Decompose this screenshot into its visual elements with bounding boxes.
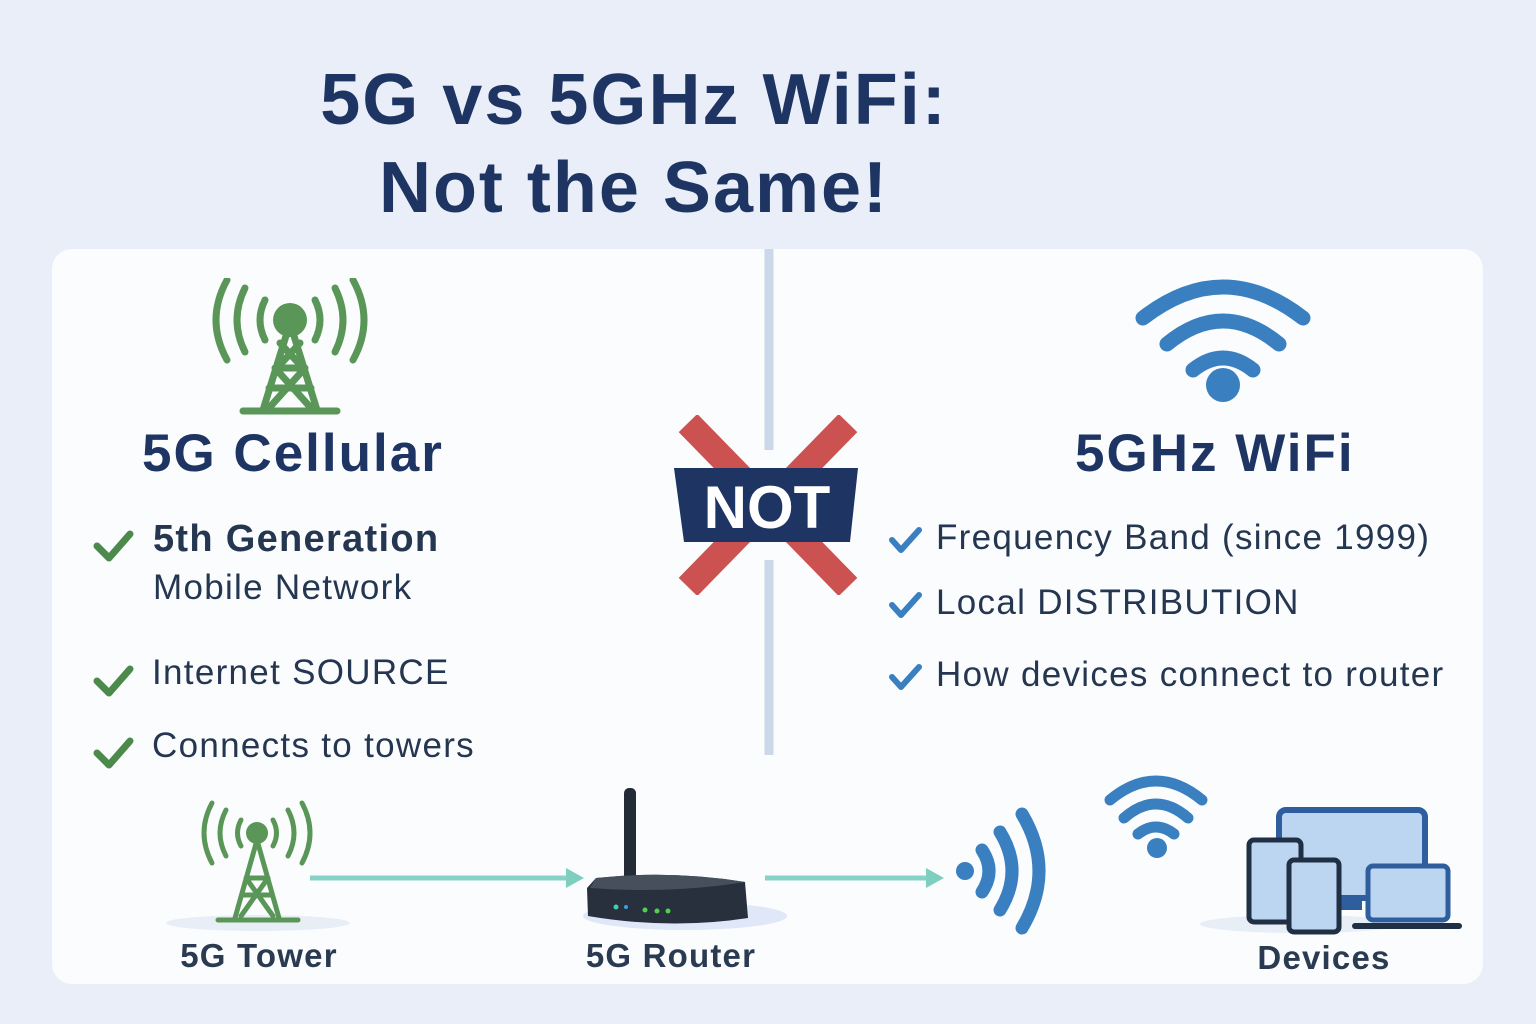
list: cellular: Connects to towers bbox=[152, 726, 475, 765]
title bbox=[320, 60, 948, 228]
icon: NOT badge: NOT bbox=[704, 474, 830, 541]
icon: NOT badge bbox=[674, 415, 858, 595]
devices bbox=[1200, 810, 1462, 933]
arrow 2 bbox=[765, 868, 944, 888]
main panel bbox=[52, 249, 1483, 984]
icon: cellular tower bbox=[212, 278, 368, 414]
flow diagram bbox=[166, 776, 1462, 934]
list: cellular: Internet SOURCE bbox=[152, 653, 450, 692]
router bbox=[583, 788, 787, 930]
side wifi waves bbox=[956, 814, 1039, 928]
label: 5G Router: 5G Router bbox=[586, 937, 756, 974]
label: Devices: Devices bbox=[1257, 939, 1391, 976]
list: wifi: Frequency Band (since 1999) bbox=[936, 518, 1430, 557]
list: cellular: Mobile Network bbox=[153, 568, 412, 607]
list: cellular: 5th Generation bbox=[153, 518, 439, 560]
list: wifi: Local DISTRIBUTION bbox=[936, 583, 1300, 622]
list: wifi: How devices connect to router bbox=[936, 655, 1444, 694]
title: 5G vs 5GHz WiFi: bbox=[320, 60, 948, 140]
label: 5G Tower: 5G Tower bbox=[180, 937, 338, 974]
title: Not the Same! bbox=[379, 148, 889, 228]
heading: 5G Cellular: 5G Cellular bbox=[142, 424, 444, 483]
icon: wifi bbox=[1136, 280, 1310, 402]
small tower bbox=[166, 803, 350, 931]
arrow 1 bbox=[310, 868, 584, 888]
small wifi bbox=[1110, 781, 1202, 858]
heading: 5GHz WiFi: 5GHz WiFi bbox=[1075, 424, 1355, 483]
list: wifi bbox=[889, 518, 1444, 694]
list: cellular bbox=[94, 518, 475, 768]
